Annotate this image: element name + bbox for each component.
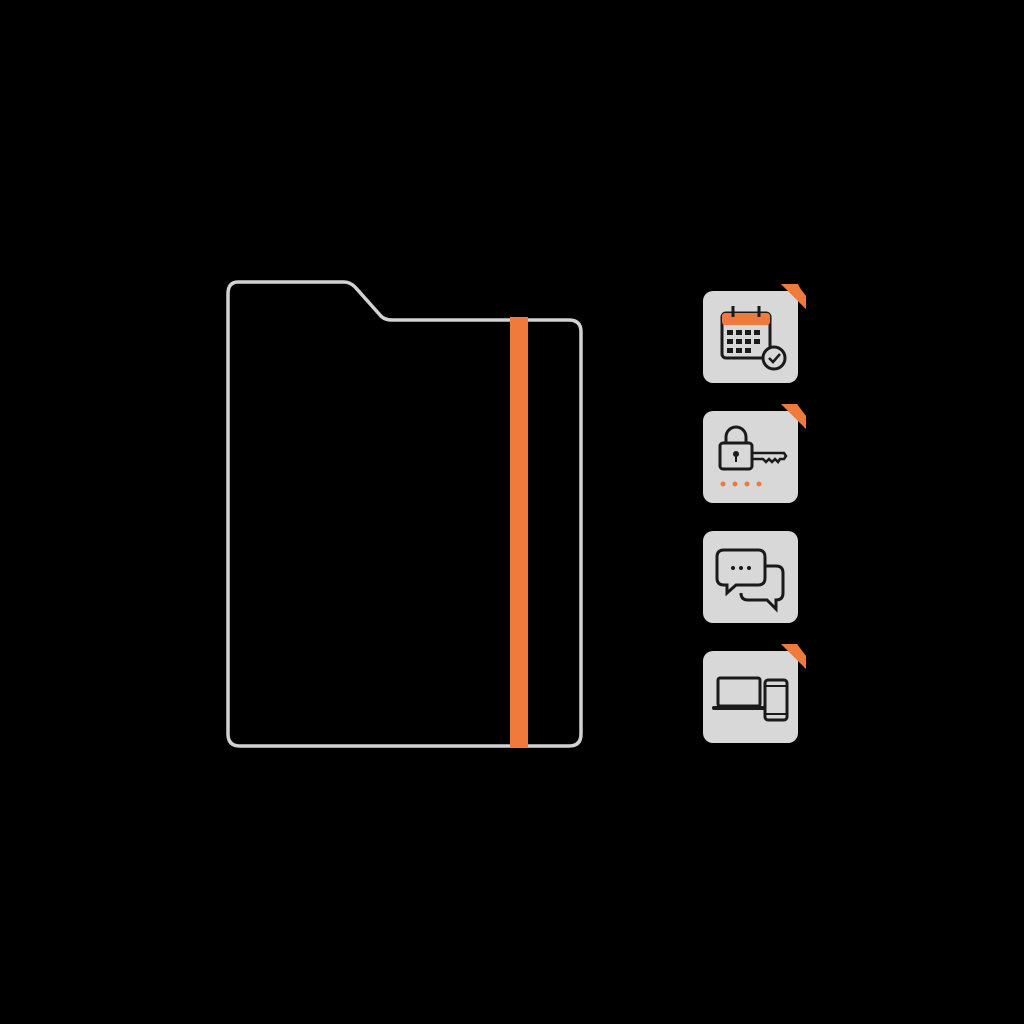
folder outline — [228, 282, 581, 748]
icon tile: devices — [703, 644, 806, 743]
icon tile: chat bubbles — [703, 531, 798, 623]
icon tile: lock and key — [703, 404, 806, 503]
icon tile: calendar — [703, 284, 806, 383]
orange band — [510, 317, 528, 748]
